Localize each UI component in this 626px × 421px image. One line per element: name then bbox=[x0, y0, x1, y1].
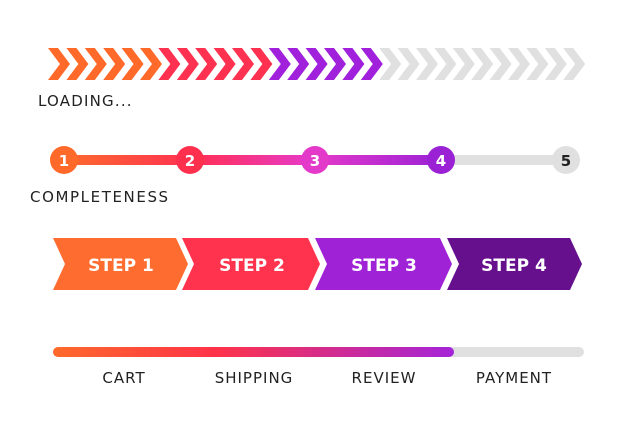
step circle 2 bbox=[176, 146, 204, 174]
step circle 2: 2 bbox=[185, 152, 195, 170]
step 4 arrow bbox=[447, 238, 582, 290]
checkout labels: SHIPPING bbox=[215, 369, 293, 387]
step 3 arrow: STEP 3 bbox=[351, 256, 417, 276]
step circle 4: 4 bbox=[436, 152, 446, 170]
step 1 arrow: STEP 1 bbox=[88, 256, 154, 276]
chevron loading bar bbox=[48, 48, 585, 80]
step 4 arrow: STEP 4 bbox=[481, 256, 547, 276]
step circle 3 bbox=[301, 146, 329, 174]
step circle 1: 1 bbox=[59, 152, 69, 170]
completeness stepper bbox=[50, 146, 580, 174]
step 3 arrow bbox=[315, 238, 452, 290]
step arrows bbox=[53, 238, 582, 290]
step circle 3: 3 bbox=[310, 152, 320, 170]
step 1 arrow bbox=[53, 238, 188, 290]
step circle 1 bbox=[50, 146, 78, 174]
checkout labels bbox=[102, 369, 552, 387]
checkout progress bar bbox=[53, 347, 584, 357]
completeness label: COMPLETENESS bbox=[30, 188, 170, 206]
step circle 5 bbox=[552, 146, 580, 174]
step circle 5: 5 bbox=[561, 152, 571, 170]
loading label: LOADING... bbox=[38, 92, 133, 110]
step 2 arrow: STEP 2 bbox=[219, 256, 285, 276]
checkout labels: PAYMENT bbox=[476, 369, 552, 387]
checkout labels: CART bbox=[102, 369, 146, 387]
step 2 arrow bbox=[182, 238, 320, 290]
step circle 4 bbox=[427, 146, 455, 174]
checkout labels: REVIEW bbox=[352, 369, 416, 387]
